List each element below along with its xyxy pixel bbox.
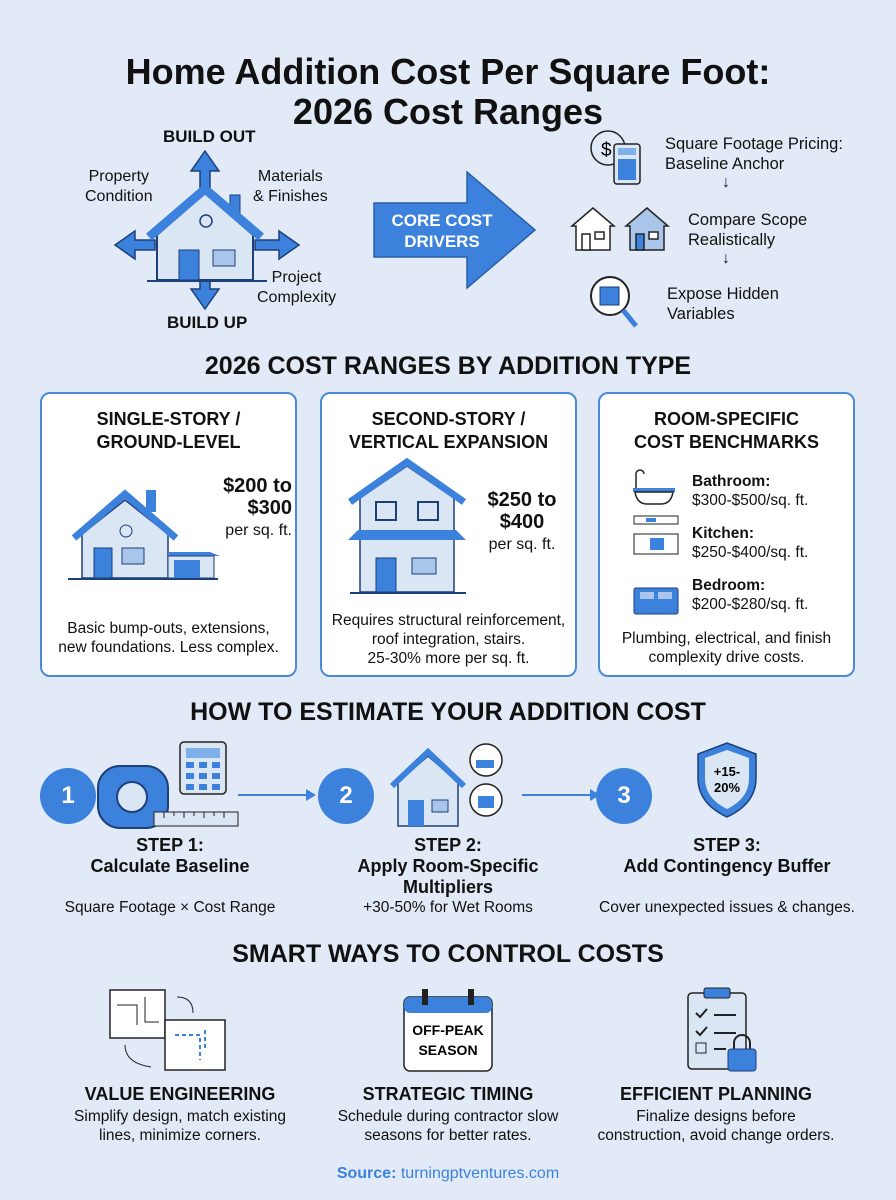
title: Home Addition Cost Per Square Foot: <box>126 51 770 92</box>
tip: strategic timing: Schedule during contractor slow <box>338 1108 558 1125</box>
panel: single-story <box>40 392 297 677</box>
diagram: house with arrows: BUILD OUT <box>163 127 256 146</box>
panel: room-specific: COST BENCHMARKS <box>634 432 819 452</box>
title: 2026 Cost Ranges <box>293 91 603 132</box>
icon: single-story house <box>68 490 220 580</box>
step 3: STEP 3: <box>693 835 761 855</box>
icon: shield <box>697 742 757 818</box>
icon: two houses <box>570 207 670 251</box>
step 2: Multipliers <box>403 877 493 897</box>
number circle <box>318 768 374 824</box>
step 2: +30-50% for Wet Rooms <box>363 899 533 916</box>
panel: single-story: GROUND-LEVEL <box>96 432 240 452</box>
price: $300 <box>248 497 292 519</box>
list: drivers <box>570 130 843 328</box>
icon: calculator dollar: $ <box>601 140 612 161</box>
price: $250 to <box>488 489 556 511</box>
panel: single-story: Basic bump-outs, extensions, <box>67 620 270 637</box>
tip: strategic timing: STRATEGIC TIMING <box>363 1084 533 1104</box>
number circle <box>40 768 96 824</box>
diagram: house with arrows: Complexity <box>257 289 336 306</box>
icon: kitchen <box>634 516 678 554</box>
list: drivers: ↓ <box>722 250 730 267</box>
price <box>488 489 556 553</box>
panel: room-specific: Plumbing, electrical, and finish <box>622 630 831 647</box>
arrow 2 <box>522 789 596 801</box>
arrow: core cost drivers: CORE COST <box>391 211 493 230</box>
icon: calendar: OFF-PEAK <box>412 1022 484 1038</box>
price: per sq. ft. <box>225 522 292 539</box>
list: drivers: Square Footage Pricing: <box>665 135 843 153</box>
icon: calculator dollar <box>590 130 641 185</box>
icon: shield: +15- <box>714 764 740 779</box>
icon: two-story house <box>348 458 466 594</box>
icon: magnifier box <box>590 276 638 328</box>
step 3: Cover unexpected issues & changes. <box>599 899 855 916</box>
tip: efficient planning: EFFICIENT PLANNING <box>620 1084 812 1104</box>
diagram: house with arrows <box>85 127 336 332</box>
panel: second-story: VERTICAL EXPANSION <box>349 432 548 452</box>
tip: efficient planning <box>598 988 834 1144</box>
panel: room-specific: complexity drive costs. <box>649 649 804 666</box>
number circle: 1 <box>61 782 75 809</box>
price: per sq. ft. <box>489 536 555 553</box>
diagram: house with arrows: BUILD UP <box>167 313 247 332</box>
list: drivers: Variables <box>667 305 735 323</box>
step 2: Apply Room-Specific <box>357 856 539 876</box>
heading: cost ranges: 2026 COST RANGES BY ADDITION TYPE <box>205 352 691 380</box>
panel: room-specific: $300-$500/sq. ft. <box>692 492 808 509</box>
panel: single-story: new foundations. Less complex. <box>58 639 279 656</box>
panel: room-specific: Bedroom: <box>692 577 765 594</box>
diagram: house with arrows: Property <box>89 168 149 185</box>
price: $400 <box>500 511 544 533</box>
panel: room-specific: $200-$280/sq. ft. <box>692 596 808 613</box>
price <box>223 475 292 539</box>
icon: calendar: SEASON <box>418 1042 478 1058</box>
icon: calendar <box>403 989 493 1072</box>
panel: second-story: roof integration, stairs. <box>372 631 525 648</box>
panel: single-story: SINGLE-STORY / <box>97 409 240 429</box>
icon: clipboard lock <box>687 988 756 1072</box>
tip: value engineering: lines, minimize corners. <box>99 1127 261 1144</box>
icon: shield: 20% <box>714 780 740 795</box>
step 1: STEP 1: <box>136 835 204 855</box>
list: drivers: Compare Scope <box>688 211 807 229</box>
step 1: Calculate Baseline <box>90 856 250 876</box>
panel: room-specific: ROOM-SPECIFIC <box>654 409 799 429</box>
title <box>126 51 770 132</box>
panel: room-specific: Bathroom: <box>692 473 770 490</box>
icon: bathtub <box>633 469 675 505</box>
heading: smart ways: SMART WAYS TO CONTROL COSTS <box>232 940 664 968</box>
source: Source: turningptventures.com <box>337 1165 559 1182</box>
panel: room-specific <box>598 392 855 677</box>
tip: strategic timing <box>338 989 558 1144</box>
number circle <box>596 768 652 824</box>
list: drivers: Realistically <box>688 231 775 249</box>
list: drivers: ↓ <box>722 174 730 191</box>
diagram: house with arrows: & Finishes <box>253 188 328 205</box>
step 1 <box>40 741 275 916</box>
icon: house with rooms <box>390 743 503 827</box>
diagram: house with arrows: Condition <box>85 188 153 205</box>
step 1: Square Footage × Cost Range <box>65 899 275 916</box>
panel: second-story: SECOND-STORY / <box>372 409 525 429</box>
tip: efficient planning: Finalize designs before <box>636 1108 796 1125</box>
panel: second-story: Requires structural reinforcement, <box>332 612 565 629</box>
step 3: Add Contingency Buffer <box>624 856 830 876</box>
tip: value engineering: VALUE ENGINEERING <box>85 1084 275 1104</box>
panel: second-story <box>320 392 577 677</box>
price: $200 to <box>223 475 292 497</box>
icon: tape + calculator <box>97 741 238 829</box>
step 2 <box>318 743 539 916</box>
list: drivers: Expose Hidden <box>667 285 779 303</box>
tip: efficient planning: construction, avoid change orders. <box>598 1127 834 1144</box>
panel: second-story: 25-30% more per sq. ft. <box>368 650 529 667</box>
diagram: house with arrows: Project <box>272 269 321 286</box>
number circle: 3 <box>617 782 631 809</box>
step 2: STEP 2: <box>414 835 482 855</box>
icon: bed <box>634 588 678 614</box>
tip: strategic timing: seasons for better rates. <box>364 1127 532 1144</box>
diagram: house with arrows: Materials <box>258 168 323 185</box>
icon: floor plans <box>109 989 226 1071</box>
number circle: 2 <box>339 782 353 809</box>
panel: room-specific: Kitchen: <box>692 525 754 542</box>
tip: value engineering: Simplify design, match existing <box>74 1108 286 1125</box>
list: drivers: Baseline Anchor <box>665 155 784 173</box>
tip: value engineering <box>74 989 286 1144</box>
arrow: core cost drivers: DRIVERS <box>404 232 480 251</box>
heading: how to estimate: HOW TO ESTIMATE YOUR ADDITION COST <box>190 698 706 726</box>
arrow 1 <box>238 789 316 801</box>
panel: room-specific: $250-$400/sq. ft. <box>692 544 808 561</box>
arrow: core cost drivers <box>373 170 536 290</box>
step 3 <box>596 742 855 916</box>
